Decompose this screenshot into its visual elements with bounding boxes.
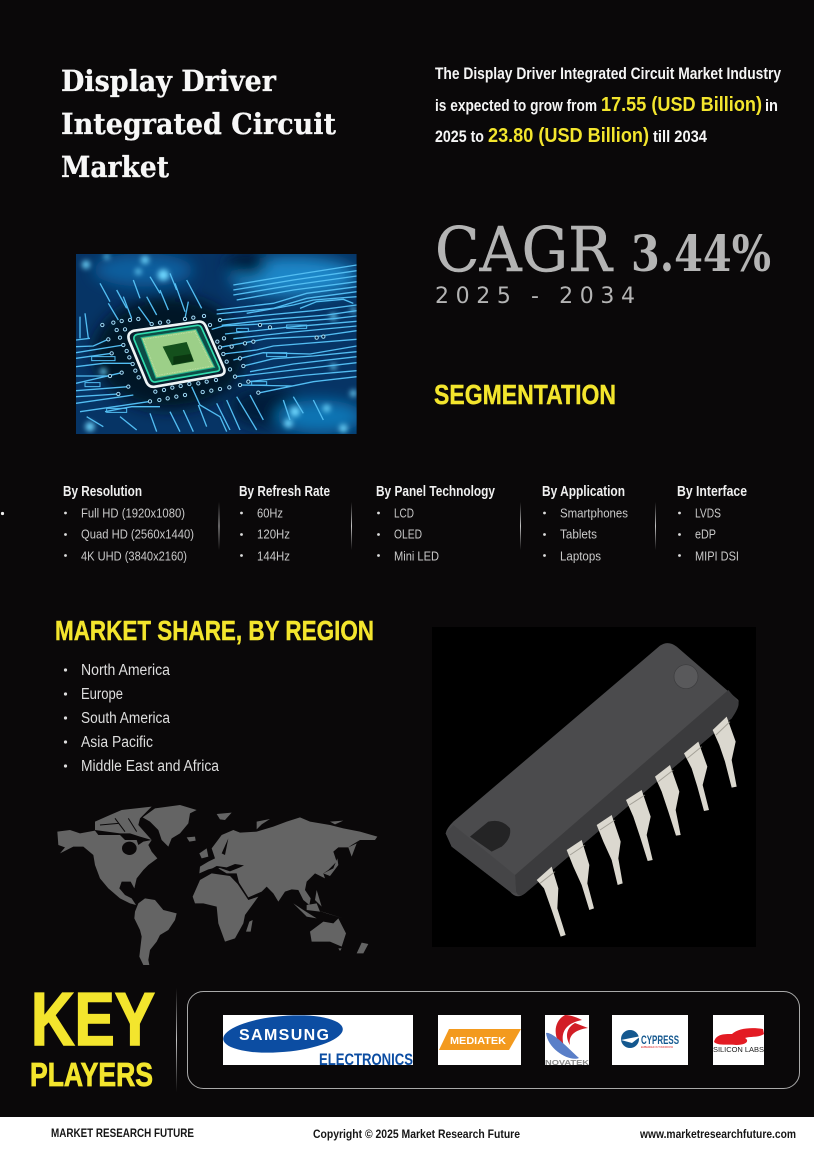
logo: novatek xyxy=(545,1015,590,1067)
segment: by panel technology: By Panel Technology xyxy=(376,484,495,500)
title xyxy=(61,64,337,184)
segment: by refresh rate: 144Hz xyxy=(257,550,290,564)
CAGR figure xyxy=(435,213,771,309)
traces left xyxy=(76,273,323,432)
title: Market xyxy=(61,150,170,184)
pin-1 dot xyxy=(674,665,698,689)
market growth statement: till 2034 xyxy=(653,128,708,146)
logo: novatek: NOVATEK xyxy=(545,1058,590,1067)
segment: by refresh rate: 60Hz xyxy=(257,506,283,520)
logo: samsung xyxy=(222,1011,413,1069)
segment: by refresh rate: 120Hz xyxy=(257,528,290,542)
market growth statement: 23.80 (USD Billion) xyxy=(488,124,649,147)
footer band: Copyright © 2025 Market Research Future xyxy=(313,1129,520,1141)
segment: by application: Tablets xyxy=(560,528,597,542)
logo: mediatek: MEDIATEK xyxy=(450,1035,506,1047)
segment: by interface: eDP xyxy=(695,528,716,542)
segment: by panel technology xyxy=(376,484,495,564)
CAGR figure: 3.44% xyxy=(631,224,771,283)
logo: cypress: EMBEDDED IN TOMORROW xyxy=(641,1045,673,1049)
market growth statement: 2025 to xyxy=(435,128,484,146)
pins xyxy=(537,717,737,937)
logo: samsung: SAMSUNG xyxy=(239,1027,329,1044)
region list: Europe xyxy=(81,686,123,703)
segment: by resolution: By Resolution xyxy=(63,484,142,500)
segment: by interface: LVDS xyxy=(695,506,721,520)
image: circuit board with microchip xyxy=(76,250,363,434)
segment: by interface xyxy=(677,484,747,564)
image: dual in-line integrated circuit xyxy=(432,627,756,947)
logo: cypress xyxy=(612,1015,688,1065)
region list: North America xyxy=(81,662,170,679)
segment: by resolution: 4K UHD (3840x2160) xyxy=(81,550,187,564)
segment: by interface: By Interface xyxy=(677,484,747,500)
segment: by resolution: Quad HD (2560x1440) xyxy=(81,528,194,542)
pin shading xyxy=(540,722,730,883)
segment: by resolution: Full HD (1920x1080) xyxy=(81,506,185,520)
segment: by application: Laptops xyxy=(560,550,601,564)
market share heading: MARKET SHARE, BY REGION xyxy=(55,615,374,646)
logo: silicon labs xyxy=(713,1015,764,1065)
key players panel xyxy=(188,992,800,1088)
chip package xyxy=(128,322,224,387)
traces right xyxy=(212,265,357,393)
CAGR figure: CAGR xyxy=(435,213,614,286)
via pads xyxy=(101,314,325,403)
footer band: MARKET RESEARCH FUTURE xyxy=(51,1128,194,1140)
market growth statement: 17.55 (USD Billion) xyxy=(601,93,762,116)
logo: mediatek xyxy=(438,1015,521,1065)
market growth statement: is expected to grow from xyxy=(435,97,597,115)
logo: samsung: ELECTRONICS xyxy=(319,1051,413,1069)
region list: Asia Pacific xyxy=(81,734,153,751)
region list: South America xyxy=(81,710,170,727)
market growth statement: in xyxy=(765,97,778,115)
footer band xyxy=(0,1117,814,1150)
segment: by refresh rate xyxy=(239,484,330,564)
logo: silicon labs: SILICON LABS xyxy=(713,1045,764,1054)
world map xyxy=(57,805,377,965)
region list: Middle East and Africa xyxy=(81,758,219,775)
body xyxy=(446,643,739,896)
key players label: PLAYERS xyxy=(30,1056,153,1093)
segment: by panel technology: OLED xyxy=(394,528,422,542)
segment: by refresh rate: By Refresh Rate xyxy=(239,484,330,500)
notch xyxy=(470,821,510,852)
footer band: www.marketresearchfuture.com xyxy=(639,1129,796,1141)
title: Integrated Circuit xyxy=(61,107,337,141)
segment: by panel technology: LCD xyxy=(394,506,414,520)
segment: by application: By Application xyxy=(542,484,625,500)
segment: by interface: MIPI DSI xyxy=(695,550,739,564)
segmentation heading: SEGMENTATION xyxy=(434,379,616,410)
key players label xyxy=(30,977,155,1093)
key players label: KEY xyxy=(31,977,155,1061)
logo: cypress: CYPRESS xyxy=(641,1033,679,1047)
bokeh highlights xyxy=(82,254,357,432)
title: Display Driver xyxy=(61,64,277,98)
CAGR figure: 2025 - 2034 xyxy=(435,284,635,309)
region list xyxy=(64,662,219,775)
stray bullet xyxy=(1,512,4,515)
segment: by panel technology: Mini LED xyxy=(394,550,439,564)
segment: by resolution xyxy=(63,484,194,564)
segment: by application xyxy=(542,484,628,564)
segment: by application: Smartphones xyxy=(560,506,628,520)
market growth statement xyxy=(435,65,782,147)
